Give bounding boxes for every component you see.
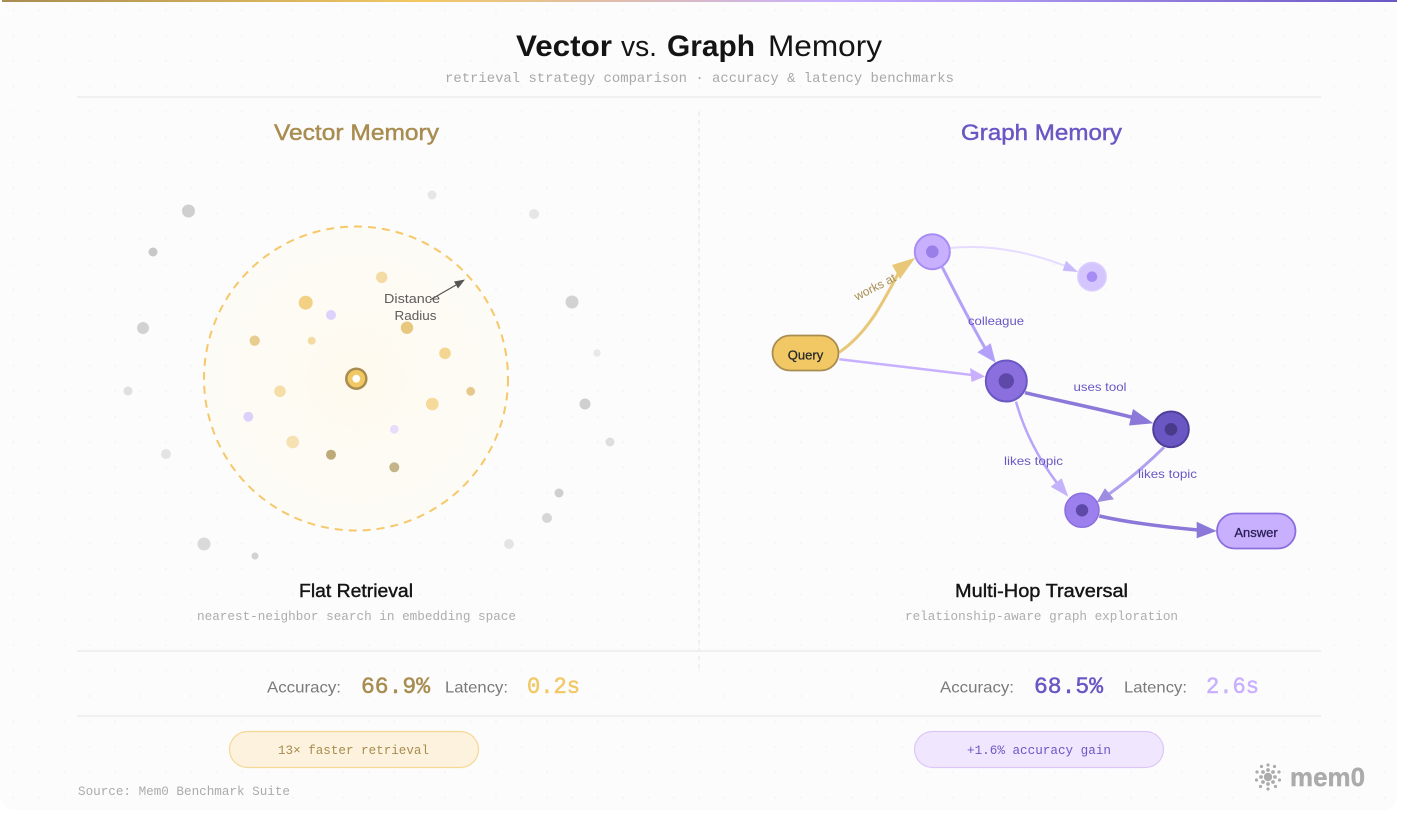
metrics: vector: 0.2s bbox=[527, 674, 580, 700]
icon: logo dots bbox=[1255, 763, 1281, 791]
metrics: graph: 2.6s bbox=[1206, 674, 1259, 700]
metrics: graph: 68.5% bbox=[1034, 674, 1103, 700]
node: tool bbox=[1153, 412, 1189, 447]
chart: vector space scatter bbox=[124, 190, 614, 560]
top gradient bar bbox=[2, 0, 1397, 2]
arrow: distance radius bbox=[430, 280, 465, 300]
title bbox=[516, 30, 882, 63]
edge labels: works at bbox=[851, 270, 899, 304]
edge: likes topic left bbox=[1016, 402, 1068, 497]
metrics: graph: Accuracy: bbox=[940, 680, 1014, 696]
node: answer: Answer bbox=[1234, 525, 1278, 540]
caption: multi-hop traversal: Multi-Hop Traversal bbox=[955, 581, 1128, 601]
metrics: graph bbox=[940, 674, 1259, 700]
title: vs. bbox=[621, 31, 657, 63]
metrics: vector: 66.9% bbox=[361, 674, 430, 700]
edge labels: uses tool bbox=[1074, 380, 1126, 394]
node: faint bbox=[1078, 262, 1106, 291]
caption: flat retrieval: Flat Retrieval bbox=[299, 581, 413, 601]
edge: colleague bbox=[942, 267, 996, 363]
edge: works at bbox=[839, 258, 915, 352]
chart: graph traversal bbox=[772, 234, 1296, 548]
badge: accuracy gain: +1.6% accuracy gain bbox=[967, 744, 1111, 758]
edge: query to hub bbox=[839, 359, 985, 382]
metrics: vector: Latency: bbox=[445, 680, 508, 696]
source note: Source: Mem0 Benchmark Suite bbox=[78, 785, 290, 799]
metrics: graph: Latency: bbox=[1124, 680, 1187, 696]
label: distance radius bbox=[384, 291, 440, 323]
title: Vector bbox=[516, 30, 612, 63]
edge: to answer bbox=[1099, 516, 1217, 538]
node: hub bbox=[986, 360, 1027, 402]
heading: Graph Memory: Graph Memory bbox=[961, 120, 1122, 145]
caption: flat retrieval: nearest-neighbor search in embedding space bbox=[197, 610, 516, 624]
title: Memory bbox=[768, 30, 882, 63]
nearby points inside radius bbox=[243, 272, 475, 472]
distance radius circle bbox=[204, 226, 508, 530]
node: top bbox=[915, 234, 950, 269]
node: answer bbox=[1217, 514, 1296, 548]
node: topic bbox=[1065, 493, 1099, 527]
edge: node to faint node bbox=[950, 247, 1078, 272]
label: distance radius: Radius bbox=[394, 308, 437, 323]
logo: mem0: mem0 bbox=[1290, 762, 1365, 792]
caption: multi-hop traversal bbox=[905, 581, 1178, 624]
subtitle: retrieval strategy comparison · accuracy & latency benchmarks bbox=[445, 71, 954, 87]
node: query: Query bbox=[788, 348, 824, 362]
label: distance radius: Distance bbox=[384, 291, 440, 306]
caption: flat retrieval bbox=[197, 581, 516, 624]
metrics: vector bbox=[267, 674, 580, 700]
badge: faster retrieval: 13× faster retrieval bbox=[278, 744, 429, 758]
edge labels: likes topic bbox=[1138, 467, 1197, 481]
title: Graph bbox=[667, 30, 755, 63]
badge: accuracy gain bbox=[914, 732, 1164, 768]
logo: mem0 bbox=[1255, 762, 1365, 792]
node: query bbox=[772, 336, 838, 370]
metrics: vector: Accuracy: bbox=[267, 680, 341, 696]
distant points outside radius bbox=[124, 190, 614, 560]
heading: Vector Memory: Vector Memory bbox=[274, 120, 439, 145]
edge labels: colleague bbox=[968, 314, 1024, 328]
edge labels bbox=[851, 270, 1197, 481]
query point bbox=[346, 369, 366, 389]
edge: uses tool bbox=[1025, 393, 1153, 426]
edge: likes topic right bbox=[1097, 447, 1164, 502]
edge labels: likes topic bbox=[1004, 454, 1063, 468]
badge: faster retrieval bbox=[230, 732, 478, 768]
caption: multi-hop traversal: relationship-aware graph exploration bbox=[905, 610, 1178, 624]
